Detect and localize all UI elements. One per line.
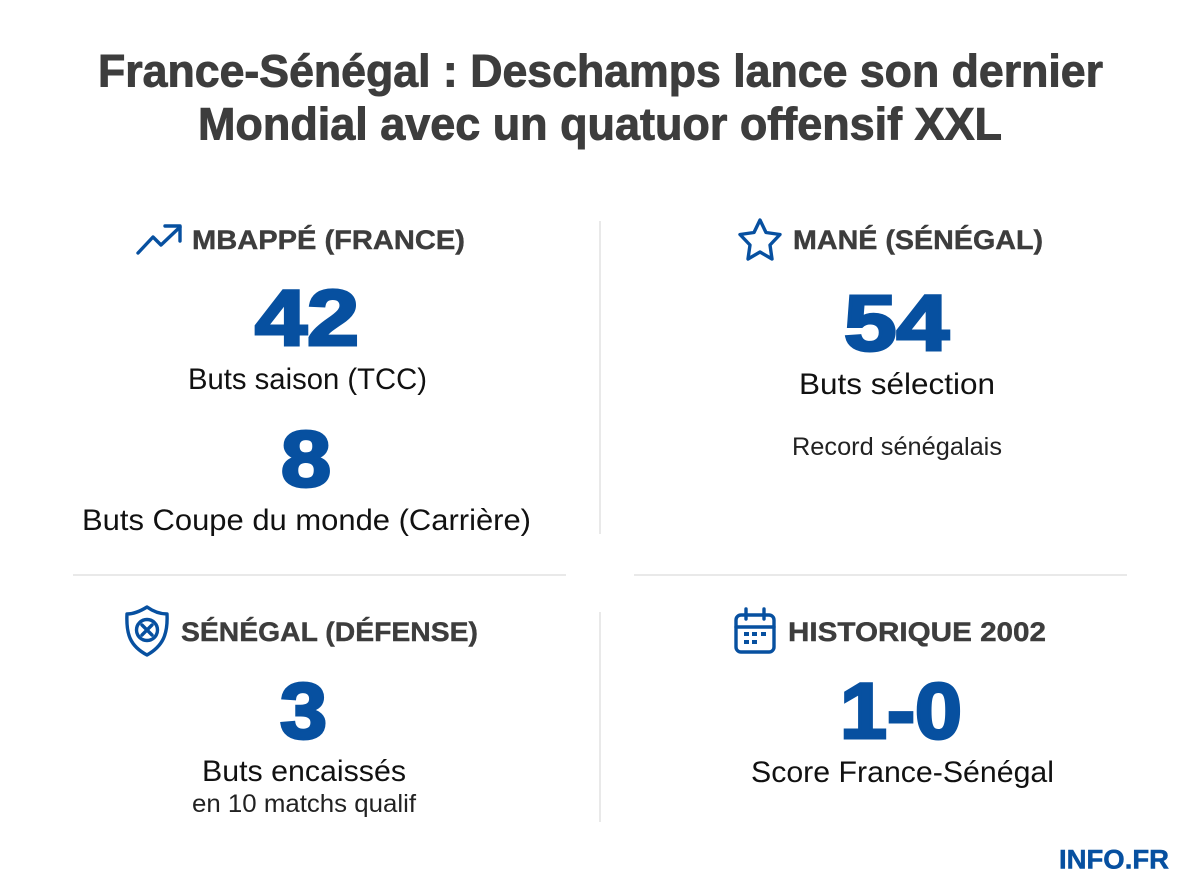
panel: Mbappé [82, 224, 531, 537]
heading: Mané: MANÉ (SÉNÉGAL) [793, 224, 1043, 255]
stat: 54: 54 [844, 278, 949, 367]
note: en 10 matchs qualif: en 10 matchs qualif [192, 790, 416, 818]
heading: Sénégal défense: SÉNÉGAL (DÉFENSE) [181, 616, 478, 647]
heading: Historique 2002: HISTORIQUE 2002 [788, 617, 1046, 647]
icon: calendar [736, 609, 774, 652]
panel: Sénégal défense [127, 607, 478, 818]
heading: Mbappé: MBAPPÉ (FRANCE) [192, 224, 465, 255]
stat: 8: 8 [281, 414, 331, 503]
panel: Mané [740, 220, 1043, 461]
stat: 42: 42 [255, 273, 359, 362]
title [98, 46, 1103, 150]
icon: trending up arrow [138, 226, 180, 253]
label: buts saison: Buts saison (TCC) [188, 363, 427, 396]
title: France-Sénégal : Deschamps lance son dernier [98, 46, 1103, 96]
icon: shield with cross [127, 607, 167, 655]
stat: 1-0: 1-0 [840, 666, 962, 755]
note: record sénégalais: Record sénégalais [792, 433, 1002, 461]
stat: 3: 3 [280, 666, 327, 755]
label: buts coupe du monde: Buts Coupe du monde (Carrière) [82, 504, 531, 537]
icon: star [740, 220, 780, 259]
panel: Historique 2002 [736, 609, 1054, 789]
logo: INFO.FR: INFO.FR [1059, 844, 1169, 874]
label: buts sélection: Buts sélection [799, 368, 995, 401]
label: score: Score France-Sénégal [751, 756, 1054, 789]
title: Mondial avec un quatuor offensif XXL [198, 98, 1002, 150]
label: buts encaissés: Buts encaissés [202, 755, 406, 788]
